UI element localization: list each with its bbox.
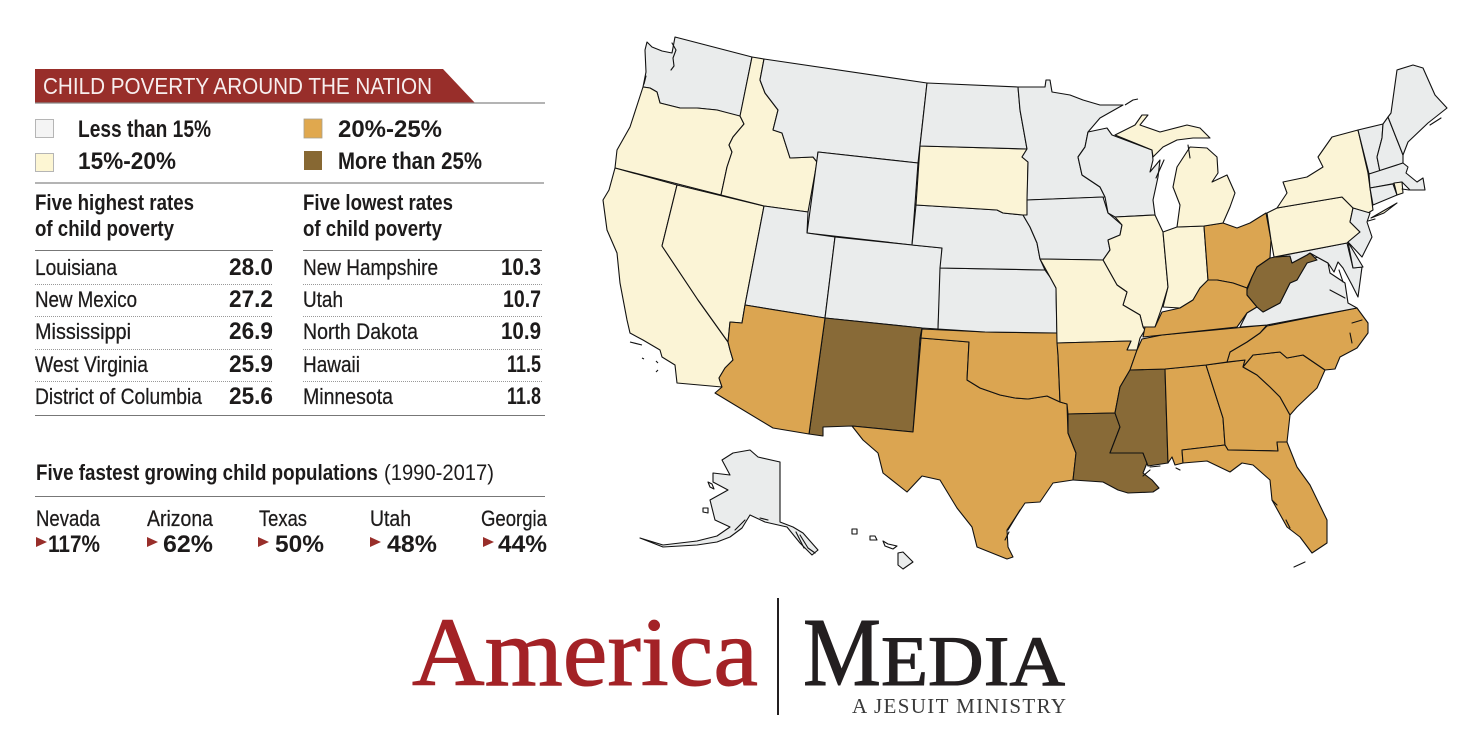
state: South Carolina (1243, 352, 1325, 415)
state: Virginia (1240, 257, 1357, 327)
title banner (35, 69, 545, 103)
legend: More than 25% (338, 148, 482, 175)
choropleth map of US states (603, 37, 1447, 569)
panel: legend and tables (35, 69, 548, 558)
state: Michigan upper (1115, 115, 1210, 157)
state: North Dakota (920, 83, 1027, 149)
state: Texas (852, 338, 1076, 559)
table: five lowest rates: Five lowest rates (303, 190, 453, 215)
logo wordmark: Media (803, 599, 1065, 706)
state: Oklahoma (921, 329, 1060, 402)
state: Ohio (1204, 213, 1271, 288)
table: five lowest rates (303, 190, 542, 410)
table: five highest rates: 25.9 (229, 351, 273, 378)
state: Washington (643, 37, 752, 117)
fastest growing populations: Texas (259, 506, 307, 531)
fastest growing populations: Georgia (481, 506, 548, 531)
state: Mississippi (1110, 369, 1168, 466)
table: five highest rates (35, 190, 273, 410)
fastest growing populations: Five fastest growing child populations (36, 460, 378, 485)
table: five highest rates: 26.9 (229, 318, 273, 345)
table: five highest rates: 28.0 (229, 254, 273, 281)
logo wordmark: America: America (412, 599, 758, 706)
state: Massachusetts (1369, 163, 1425, 190)
state: Montana (760, 59, 927, 163)
state: Kansas (938, 268, 1057, 333)
fastest growing populations: 62% (163, 531, 213, 558)
legend: Less than 15% (78, 116, 211, 143)
fastest growing populations: Nevada (36, 506, 101, 531)
state: Wyoming (807, 152, 918, 245)
coastline detail (644, 43, 1441, 567)
state: Nevada (662, 185, 764, 342)
state: California (603, 168, 733, 387)
fastest growing populations: 50% (275, 531, 324, 558)
state: West Virginia (1247, 253, 1317, 312)
state: Alabama (1165, 365, 1225, 465)
table: five lowest rates: North Dakota (303, 319, 419, 344)
state: Arkansas (1057, 341, 1137, 414)
state: Illinois (1103, 215, 1168, 327)
state: New York, Long Island (1371, 203, 1397, 218)
state: Vermont (1358, 124, 1383, 174)
fastest growing populations: 48% (387, 531, 437, 558)
state: Nebraska (912, 205, 1045, 270)
table: five lowest rates: 10.7 (503, 286, 541, 313)
state: Colorado (825, 237, 942, 329)
table: five lowest rates: Minnesota (303, 384, 394, 409)
state: Delaware (1348, 242, 1363, 268)
state: New Hampshire (1377, 117, 1403, 172)
table: five highest rates: of child poverty (35, 216, 175, 241)
fastest growing populations: 117% (48, 531, 100, 558)
logo tagline: A JESUIT MINISTRY (852, 694, 1066, 718)
table: five lowest rates: 10.3 (501, 254, 541, 281)
state: North Carolina (1227, 308, 1368, 370)
fastest growing populations: Utah (370, 506, 411, 531)
state: Missouri (1040, 259, 1145, 350)
legend (36, 116, 482, 175)
state: Georgia (1206, 360, 1290, 451)
title banner: CHILD POVERTY AROUND THE NATION (43, 73, 432, 99)
legend: 15%-20% (78, 148, 176, 175)
fastest growing populations: Arizona (147, 506, 214, 531)
logo: America Media (412, 598, 1066, 718)
state: Utah (745, 206, 835, 318)
islands detail (630, 99, 1138, 513)
state: Wisconsin (1078, 128, 1160, 217)
state: Rhode Island (1394, 182, 1403, 195)
state: New Mexico (809, 318, 922, 436)
state: Idaho (721, 57, 817, 212)
state: Connecticut (1370, 184, 1397, 205)
state: Indiana (1163, 226, 1208, 308)
fastest growing populations (35, 460, 548, 558)
state: Pennsylvania (1267, 197, 1360, 257)
table: five highest rates: Mississippi (35, 319, 131, 344)
table: five lowest rates: New Hampshire (303, 255, 438, 280)
table: five highest rates: Five highest rates (35, 190, 194, 215)
state: Tennessee (1130, 325, 1267, 370)
table: five highest rates: New Mexico (35, 287, 137, 312)
fastest growing populations: 44% (498, 531, 547, 558)
table: five highest rates: District of Columbia (35, 384, 203, 409)
table: five lowest rates: of child poverty (303, 216, 443, 241)
table: five highest rates: 27.2 (229, 286, 273, 313)
state: Louisiana (1068, 413, 1159, 493)
table: five highest rates: West Virginia (35, 352, 149, 377)
state: Michigan lower (1173, 147, 1235, 227)
legend: 20%-25% (338, 116, 442, 143)
state: Arizona (715, 305, 825, 434)
logo wordmark: Media: M (803, 599, 881, 706)
state: Minnesota (1018, 80, 1123, 200)
state: South Dakota (916, 146, 1028, 215)
table: five lowest rates: Utah (303, 287, 343, 312)
logo wordmark: Media: EDIA (881, 623, 1065, 701)
state: Oregon (615, 87, 744, 195)
fastest growing populations: (1990-2017) (384, 460, 494, 485)
table: five highest rates: 25.6 (229, 383, 273, 410)
state: Kentucky (1143, 280, 1257, 337)
state: Iowa (1023, 197, 1122, 260)
logo divider (777, 598, 779, 715)
state: New Jersey (1348, 208, 1372, 257)
table: five highest rates: Louisiana (35, 255, 118, 280)
table: five lowest rates: 11.5 (507, 351, 541, 378)
state: New York (1277, 130, 1373, 213)
table: five lowest rates: 10.9 (501, 318, 541, 345)
table: five lowest rates: Hawaii (303, 352, 360, 377)
state: Maryland (1275, 243, 1362, 297)
state: Alaska (640, 450, 818, 555)
state: Hawaii (852, 529, 913, 569)
table: five lowest rates: 11.8 (507, 383, 541, 410)
state: Florida (1182, 442, 1327, 553)
state: Maine (1388, 65, 1447, 155)
